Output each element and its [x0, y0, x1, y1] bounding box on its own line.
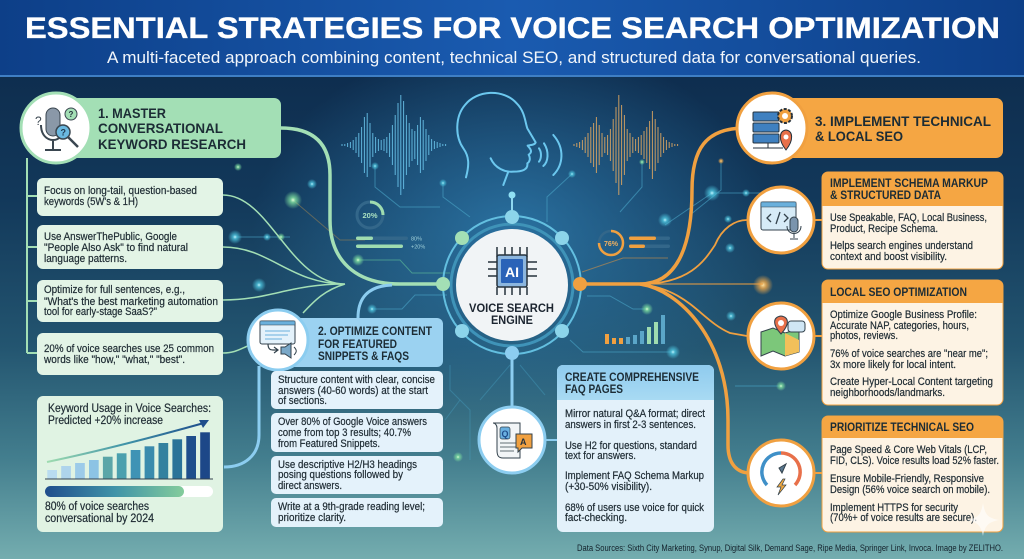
heading: section 2 [262, 318, 443, 367]
heading: local SEO: LOCAL SEO OPTIMIZATION [830, 285, 967, 299]
connector: section 2 to hub [224, 285, 557, 467]
text block: FAQ details: text for answers. [565, 450, 636, 462]
text block: FAQ details: answers in first 2-3 sentences. [565, 419, 696, 431]
text block: schema: Product, Recipe Schema. [830, 223, 938, 235]
text block: local SEO: 3x more likely for local intent. [830, 359, 956, 371]
icon: code window with microphone [748, 187, 814, 253]
title: ESSENTIAL STRATEGIES FOR VOICE SEARCH OPTIMIZATION [25, 12, 1000, 45]
text block: schema [830, 212, 987, 263]
heading: FAQ: FAQ PAGES [565, 382, 623, 396]
text block: schema: Use Speakable, FAQ, Local Business, [830, 212, 987, 224]
icon: Q and A document [479, 407, 545, 473]
header banner [0, 0, 1024, 77]
text block: local SEO: 76% of voice searches are "near me"; [830, 348, 988, 360]
text block: headings [271, 456, 443, 494]
icon: microphone with magnifier: ? [35, 114, 42, 128]
text block: technical SEO: Page Speed & Core Web Vitals (LCP, [830, 444, 987, 456]
text block: FAQ details [565, 408, 705, 524]
text block: long-tail keywords: keywords (5W's & 1H) [44, 196, 138, 208]
text block: technical SEO: Implement HTTPS for security [830, 502, 959, 514]
chart title [48, 403, 211, 427]
text block: tools [37, 225, 223, 269]
icon: browser with speaker [248, 310, 308, 370]
caption: 80% conversational [45, 501, 155, 525]
heading: section 3 [760, 98, 1003, 158]
text block: common words [37, 333, 223, 375]
text block: reading level: Write at a 9th-grade reading level; [278, 501, 425, 513]
text block: FAQ details: fact-checking. [565, 512, 627, 524]
text block: headings: Use descriptive H2/H3 headings [278, 459, 418, 471]
text block: google voice answers [271, 413, 443, 452]
chart title: Keyword Usage in Voice Searches: [48, 403, 211, 415]
bars [45, 432, 213, 479]
text block: full sentences: Optimize for full sentences, e.g., [44, 284, 185, 296]
central hub: voice search engine: ENGINE [491, 313, 533, 327]
panel: FAQ pages [479, 365, 714, 532]
connector: section 3 branches [580, 128, 822, 473]
text block: schema: Helps search engines understand [830, 240, 973, 252]
text block: google voice answers: come from top 3 results; 40.7% [278, 427, 411, 439]
text block: FAQ details: Mirror natural Q&A format; direct [565, 408, 705, 420]
text block: tools: "People Also Ask" to find natural [44, 242, 188, 254]
heading: section 1: KEYWORD RESEARCH [98, 136, 246, 152]
heading: section 1 [60, 98, 281, 158]
text block: structure content [271, 371, 443, 409]
circuit lines background [235, 161, 781, 460]
heading: section 3: 3. IMPLEMENT TECHNICAL [815, 113, 991, 129]
stat: 20% donut and bars: 80% [411, 236, 422, 242]
text block: technical SEO: Design (56% voice search on mobile). [830, 484, 990, 496]
heading: schema: & STRUCTURED DATA [830, 188, 941, 202]
icon: speedometer with lightning [748, 440, 814, 506]
icon: speaking head outline [457, 93, 561, 185]
text block: local SEO: Optimize Google Business Profile: [830, 309, 977, 321]
icon: Q and A document: Q [502, 429, 509, 439]
text block: google voice answers: from Featured Snippets. [278, 438, 380, 450]
text block: FAQ details: 68% of users use voice for quick [565, 502, 705, 514]
heading: section 3: & LOCAL SEO [815, 128, 903, 144]
progress bar: 80% [45, 486, 213, 497]
icon: Q and A document: A [520, 437, 527, 447]
FAQ card [557, 365, 714, 532]
heading: section 2: 2. OPTIMIZE CONTENT [318, 324, 433, 338]
icon: microphone with magnifier: ? [68, 110, 74, 119]
caption: 80% conversational: conversational by 2024 [45, 513, 155, 525]
stat: 20% donut and bars [356, 202, 425, 250]
icon: AI chip: AI [505, 264, 519, 280]
card: schema markup [822, 172, 1003, 269]
text block: long-tail keywords [37, 178, 223, 216]
stat: 20% donut and bars: 20% [362, 211, 378, 220]
text block: full sentences: tool for early-stage SaaS?" [44, 306, 157, 318]
text block: FAQ details: Use H2 for questions, standard [565, 440, 697, 452]
caption: 80% conversational: 80% of voice searches [45, 501, 149, 513]
text block: tools: language patterns. [44, 253, 127, 265]
text block: FAQ details: Implement FAQ Schema Markup [565, 470, 704, 482]
subtitle: A multi-faceted approach combining content, technical SEO, and structured data for conversational queries. [107, 49, 921, 67]
hub label: VOICE SEARCH [469, 301, 554, 315]
text block: schema: context and boost visibility. [830, 251, 947, 263]
card: technical SEO [822, 416, 1003, 532]
text block: structure content: Structure content with clear, concise [278, 374, 435, 386]
heading: section 2: FOR FEATURED [318, 337, 397, 351]
chart: keyword usage in voice searches [37, 396, 223, 532]
heading: FAQ [565, 370, 699, 396]
central hub: voice search engine [436, 192, 587, 360]
text block: technical SEO: (70%+ of voice results are secure). [830, 512, 977, 524]
text block: reading level [271, 498, 443, 527]
sparkle [967, 503, 999, 536]
heading: section 1: 1. MASTER [98, 105, 166, 121]
heading: schema: IMPLEMENT SCHEMA MARKUP [830, 176, 988, 190]
stat: 76% donut and bars: 76% [604, 241, 619, 248]
panel: section 2 featured snippets [248, 310, 443, 527]
heading: section 2: SNIPPETS & FAQS [318, 349, 409, 363]
text block: local SEO: Accurate NAP, categories, hours, [830, 320, 969, 332]
text block: technical SEO: Ensure Mobile-Friendly, Responsive [830, 473, 984, 485]
stat: 76% donut and bars [599, 231, 670, 255]
glowing circuit dots [228, 158, 786, 462]
icon: microphone with magnifier: ? [60, 128, 66, 138]
text block: structure content: of sections. [278, 395, 327, 407]
panel: section 1 keyword research [21, 93, 281, 532]
text block: common words: words like "how," "what," "best". [43, 354, 185, 366]
connector: section 1 thick trunk [27, 128, 443, 353]
heading: technical SEO: PRIORITIZE TECHNICAL SEO [830, 420, 974, 434]
icon: servers, gear and pin [737, 93, 807, 163]
heading: FAQ: CREATE COMPREHENSIVE [565, 370, 699, 384]
text block: technical SEO [830, 444, 999, 524]
card: local SEO [822, 280, 1003, 405]
chart title: Predicted +20% increase [48, 415, 163, 427]
text block: FAQ details: (+30-50% visibility). [565, 481, 652, 493]
text block: headings: direct answers. [278, 480, 342, 492]
text block: full sentences: "What's the best marketing automation [44, 296, 218, 308]
mini bar chart [605, 315, 665, 344]
hub nodes [436, 210, 587, 360]
heading: section 1: CONVERSATIONAL [98, 120, 223, 136]
icon: microphone with magnifier [21, 93, 91, 163]
text block: google voice answers: Over 80% of Google Voice answers [278, 416, 428, 428]
orange waveform [574, 95, 678, 195]
panel: section 3 technical and local SEO [737, 93, 1003, 532]
connector: section 1 bullets [223, 195, 345, 353]
text block: common words: 20% of voice searches use 25 common [44, 343, 214, 355]
text block: structure content: answers (40-60 words) at the start [278, 385, 428, 397]
icon: AI chip [488, 247, 537, 295]
text block: local SEO: photos, reviews. [830, 330, 898, 342]
heading: schema [830, 176, 988, 202]
text block: long-tail keywords: Focus on long-tail, question-based [44, 185, 197, 197]
text block: local SEO: Create Hyper-Local Content targeting [830, 376, 993, 388]
text block: reading level: prioritize clarity. [278, 512, 346, 524]
text block: tools: Use AnswerThePublic, Google [44, 231, 177, 243]
blue waveform [342, 95, 446, 195]
text block: headings: posing questions followed by [278, 469, 404, 481]
text block: full sentences [37, 280, 223, 322]
text block: local SEO: neighborhoods/landmarks. [830, 387, 945, 399]
trend arrow [47, 420, 209, 462]
text block: local SEO [830, 309, 993, 399]
text block: technical SEO: FID, CLS). Voice results load 52% faster. [830, 455, 999, 467]
icon: map with pin [748, 303, 814, 369]
stat: 20% donut and bars: +20% [411, 244, 425, 250]
